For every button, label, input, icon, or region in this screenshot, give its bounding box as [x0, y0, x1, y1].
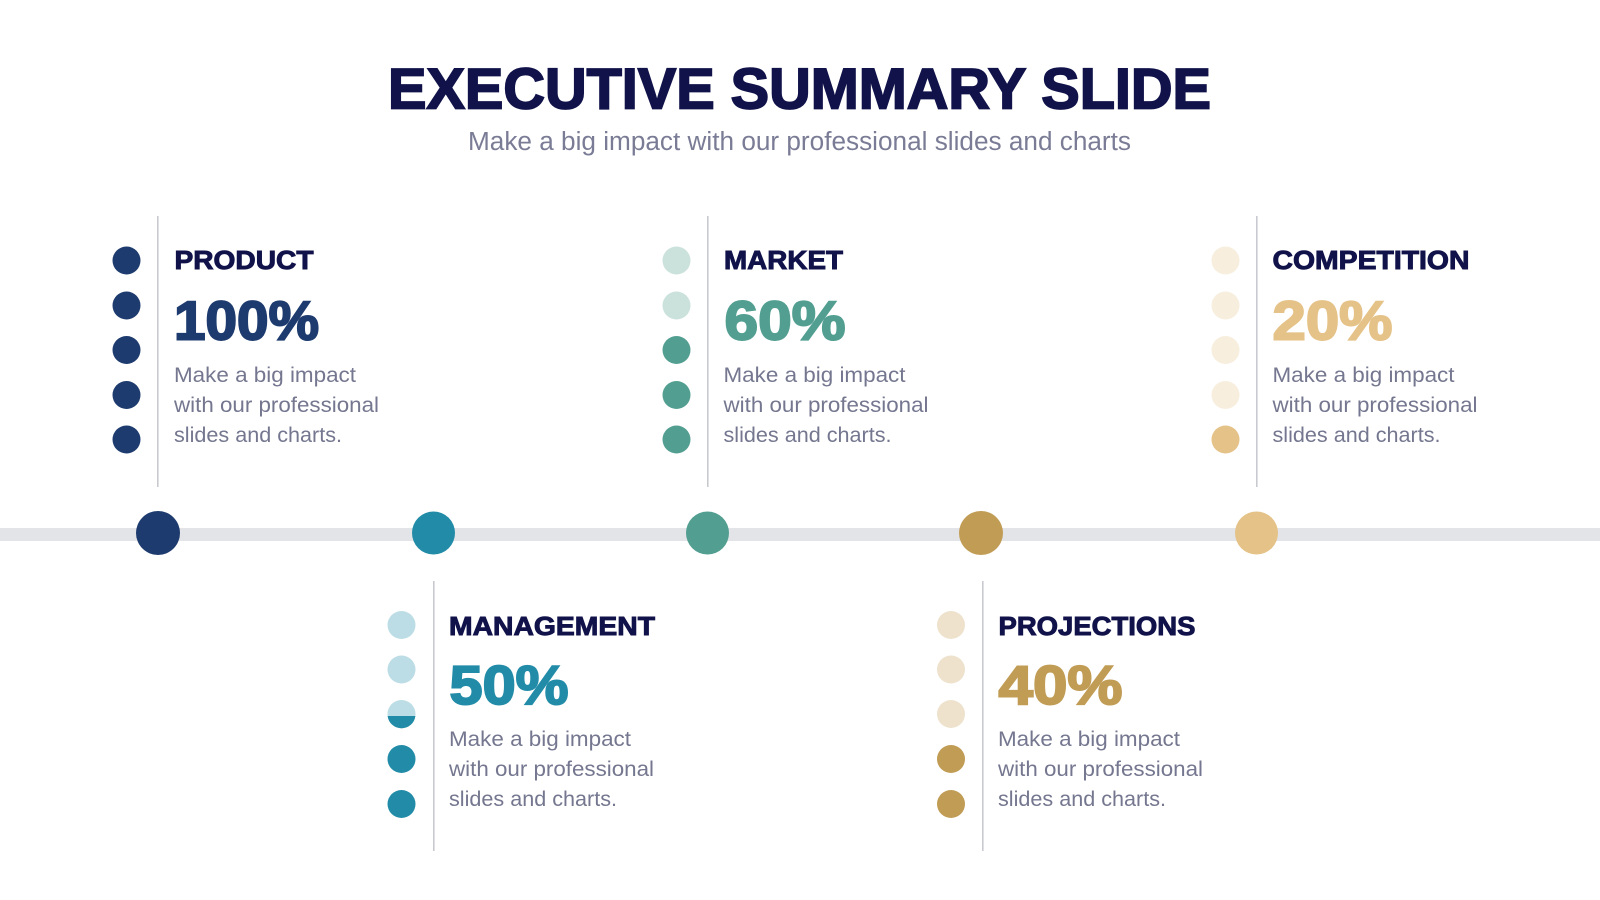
heading: competition: COMPETITION — [1272, 247, 1470, 275]
value: competition: 20% — [1272, 290, 1392, 352]
timeline — [0, 511, 1600, 555]
description: management: Make a big impact — [449, 727, 631, 751]
progress dots: management — [388, 611, 416, 818]
progress dots: product — [112, 246, 140, 454]
description: product — [173, 363, 379, 447]
timeline marker: management — [412, 512, 455, 554]
description: projections — [997, 727, 1203, 811]
description: market: with our professional — [722, 393, 928, 417]
panel: market — [662, 216, 928, 487]
panel: projections — [937, 581, 1203, 851]
description: competition: Make a big impact — [1272, 363, 1455, 387]
heading: product: PRODUCT — [174, 247, 314, 275]
value: product: 100% — [174, 290, 319, 352]
value: projections: 40% — [998, 654, 1122, 716]
description: product: Make a big impact — [174, 363, 356, 387]
panel: product — [112, 216, 379, 487]
timeline marker: market — [686, 512, 729, 554]
value: market: 60% — [724, 290, 846, 352]
description: competition — [1271, 363, 1478, 447]
description: management: with our professional — [448, 757, 654, 781]
description: market: slides and charts. — [724, 423, 892, 447]
timeline marker: product — [136, 511, 180, 555]
description: market — [722, 363, 928, 447]
description: competition: with our professional — [1271, 393, 1478, 417]
description: management — [448, 727, 654, 811]
description: product: with our professional — [173, 393, 379, 417]
progress dots: projections — [937, 611, 965, 818]
title: EXECUTIVE SUMMARY SLIDE — [388, 58, 1211, 122]
timeline marker: projections — [959, 511, 1003, 555]
subtitle: Make a big impact with our professional slides and charts — [468, 128, 1131, 156]
description: projections: with our professional — [997, 757, 1203, 781]
description: product: slides and charts. — [174, 423, 342, 447]
panel: management — [388, 581, 655, 851]
heading: projections: PROJECTIONS — [998, 613, 1196, 641]
progress dots: competition — [1212, 246, 1240, 454]
description: competition: slides and charts. — [1272, 423, 1440, 447]
description: projections: Make a big impact — [998, 727, 1180, 751]
heading: market: MARKET — [724, 247, 843, 275]
value: management: 50% — [450, 654, 568, 716]
panel: competition — [1212, 216, 1478, 487]
progress dots: market — [662, 246, 690, 454]
description: management: slides and charts. — [449, 787, 617, 811]
description: projections: slides and charts. — [998, 787, 1166, 811]
heading: management: MANAGEMENT — [449, 613, 655, 641]
description: market: Make a big impact — [724, 363, 906, 387]
timeline marker: competition — [1235, 512, 1278, 554]
